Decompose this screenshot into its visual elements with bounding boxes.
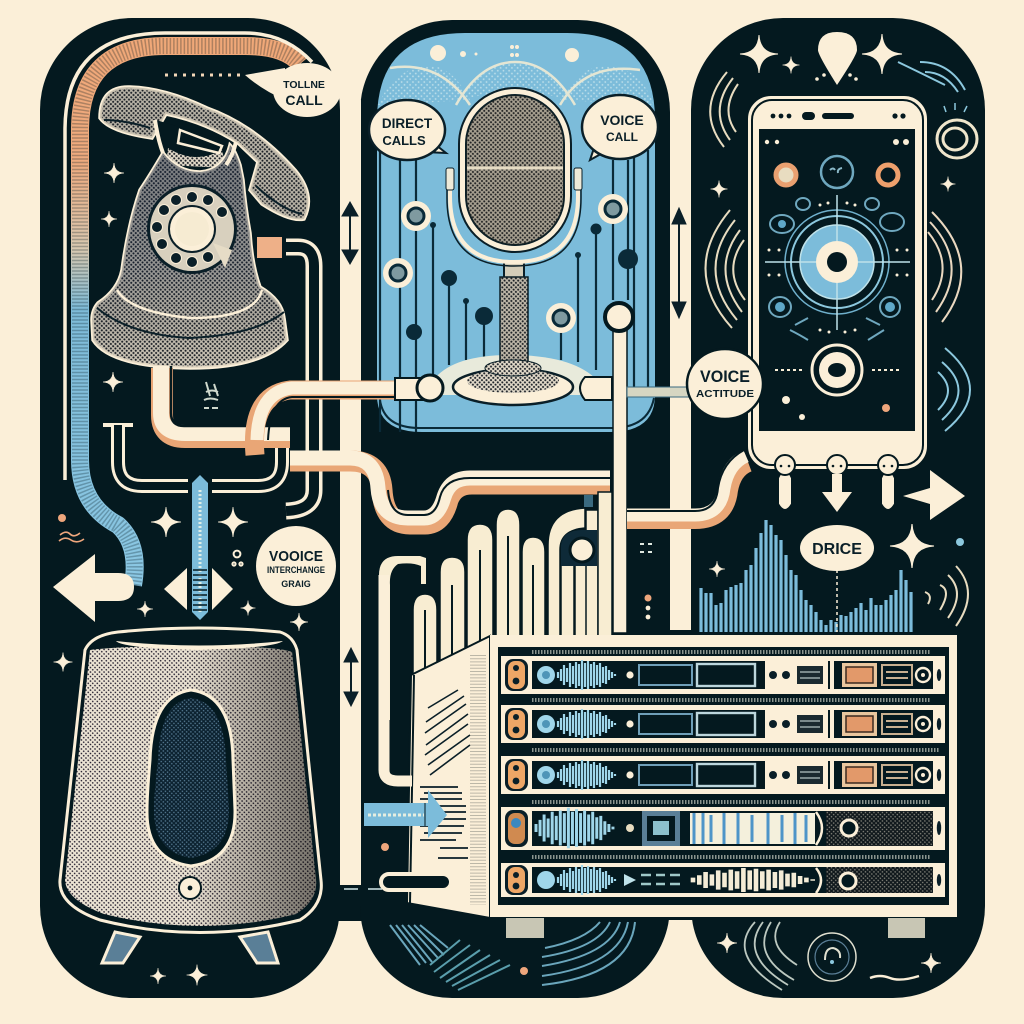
small person glyph	[232, 551, 243, 566]
server front frame	[490, 635, 957, 917]
panel: server rack	[407, 635, 957, 918]
panel: centre microphone and server column	[360, 20, 670, 998]
callout: voice instructions bubble	[256, 526, 336, 606]
pipe curving into server	[384, 575, 412, 781]
speech bubble: telephone call: TOLLNE	[283, 79, 325, 91]
cord: phone to panel double line	[286, 247, 314, 511]
right panel bottom decorations	[717, 918, 941, 990]
callout: drice pill	[800, 525, 874, 632]
callout: voice activation bubble: ACTITUDE	[696, 389, 754, 400]
organ pipes sound bars	[379, 492, 612, 720]
sparkles right panel	[709, 34, 964, 577]
server unit 1	[501, 656, 945, 694]
microphone signal lines and nodes	[380, 150, 648, 432]
arrow: double arrow upper right	[672, 208, 686, 318]
microphone right connector	[580, 377, 689, 400]
callout: voice instructions bubble: INTERCHANGE	[267, 565, 325, 575]
node: junction on organ pipes	[561, 495, 597, 566]
dotted line to telephone bubble	[165, 74, 240, 76]
hatched block under server left	[506, 918, 544, 938]
callout: drice pill: DRICE	[812, 541, 862, 558]
gutter joint marks	[344, 888, 382, 890]
cream gutter strip lower right	[664, 630, 698, 920]
decorative dots	[640, 544, 652, 619]
speech bubble: voice call: VOICE	[600, 112, 644, 128]
server unit 4 waveform	[501, 807, 945, 850]
pipe: right pipe to smartphone	[627, 450, 748, 519]
server unit 2	[501, 705, 945, 743]
cable stub into server side	[381, 843, 451, 890]
icon: smartphone	[747, 95, 928, 470]
callout: voice instructions bubble: GRAIG	[281, 579, 311, 589]
accent dot and squiggle left	[58, 514, 84, 542]
icon: smart speaker	[60, 628, 321, 963]
callout: voice activation bubble	[687, 349, 763, 419]
vent hatch lines	[532, 652, 940, 857]
server unit 5 waveform	[501, 863, 945, 897]
callout: voice instructions bubble: VOOICE	[269, 548, 323, 565]
vertical bar with ball from microphone	[605, 303, 633, 633]
cord: long gradient tube around telephone	[65, 33, 312, 585]
icon: location pin	[815, 32, 858, 85]
cord: T-shaped double line loop	[103, 425, 282, 486]
icon: rotary telephone	[92, 87, 308, 368]
panel: blue microphone backdrop	[377, 33, 655, 432]
icon: ring at upper right	[937, 103, 977, 158]
arrow: double arrow lower left	[344, 648, 358, 706]
sparkles left panel	[54, 163, 308, 986]
phone bottom plugs	[775, 441, 898, 510]
pipe: phone base to junction	[161, 366, 290, 437]
speech bubble: voice call: CALL	[606, 130, 638, 144]
pipe: wavy middle pipe to server bar	[290, 458, 610, 524]
arrow: blue arrow into server	[364, 790, 447, 838]
speech bubble: voice call	[582, 95, 658, 160]
microphone left connector	[395, 375, 443, 401]
panel: right smartphone column	[691, 18, 985, 998]
arrow: double arrow upper left	[342, 202, 358, 264]
speech bubble: direct calls	[369, 100, 446, 160]
server dark interior	[498, 647, 949, 905]
chart: audio level bars	[701, 520, 911, 632]
server unit 3	[501, 756, 945, 794]
right panel signal arcs	[705, 62, 970, 626]
speech bubble: direct calls: CALLS	[382, 133, 426, 148]
arrow: right beside phone	[903, 470, 965, 520]
speech bubble: direct calls: DIRECT	[382, 116, 433, 131]
speech bubble: telephone call: CALL	[285, 92, 323, 108]
arrow: cream left arrow from tube	[53, 554, 134, 622]
wave glyph between pipes	[204, 382, 218, 408]
arrow: down below phone	[822, 474, 852, 512]
gutter strip between centre and right columns	[670, 100, 691, 630]
icon: desk microphone	[435, 88, 595, 405]
gutter strip between left and centre columns	[340, 100, 361, 885]
panel: left telephone and speaker column	[40, 18, 490, 998]
centre panel bottom fan arcs	[390, 922, 635, 990]
callout: voice activation bubble: VOICE	[700, 367, 750, 386]
arrow: blue vertical arrow with side triangles	[164, 475, 233, 620]
speech bubble: telephone call	[245, 63, 341, 117]
server side face	[407, 636, 490, 918]
accent dot bottom centre	[520, 967, 528, 975]
pipe: junction to microphone	[254, 388, 418, 455]
